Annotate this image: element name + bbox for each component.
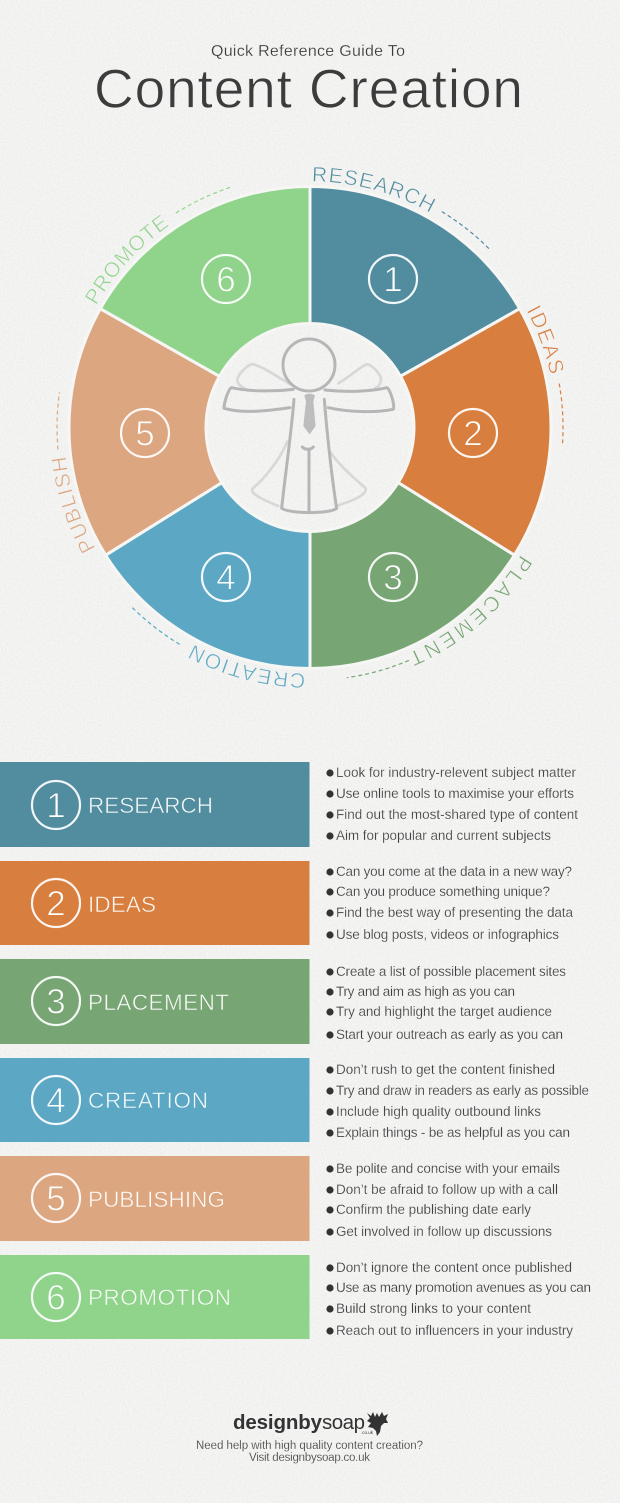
dashed arc: placement bbox=[347, 660, 409, 678]
list: research: Aim for popular and current subjects bbox=[336, 828, 551, 843]
subtitle: Quick Reference Guide To bbox=[211, 43, 405, 60]
curved label: creation: CREATION bbox=[188, 646, 304, 688]
list: research bbox=[326, 765, 578, 843]
segment 2: ideas bbox=[398, 309, 551, 555]
panel: creation: CREATION bbox=[88, 1088, 208, 1113]
list: publishing: Get involved in follow up discussions bbox=[336, 1224, 552, 1239]
list: placement: Start your outreach as early as you can bbox=[336, 1027, 563, 1042]
central figure icon bbox=[224, 339, 394, 513]
list: ideas bbox=[326, 864, 573, 942]
panel: research: 1 bbox=[46, 786, 66, 826]
list: placement bbox=[326, 964, 566, 1042]
list: ideas: Use blog posts, videos or infographics bbox=[336, 927, 559, 942]
list: publishing bbox=[326, 1161, 560, 1239]
number 1 bbox=[369, 255, 417, 303]
list: research: Look for industry-relevent subject matter bbox=[336, 765, 576, 780]
panel: promotion: PROMOTION bbox=[88, 1285, 231, 1310]
dashed arc: promote bbox=[176, 187, 230, 213]
list: creation: Explain things - be as helpful as you can bbox=[336, 1125, 570, 1140]
panel: ideas: IDEAS bbox=[88, 892, 156, 917]
dashed arc: creation bbox=[131, 606, 180, 644]
panel: publishing bbox=[0, 1156, 310, 1241]
dashed arc: ideas bbox=[559, 384, 563, 445]
number 1: 1 bbox=[383, 260, 403, 300]
panel: placement: 3 bbox=[46, 982, 66, 1022]
footer logo bbox=[233, 1411, 388, 1436]
number 6 bbox=[202, 255, 250, 303]
list: ideas: Can you produce something unique? bbox=[336, 884, 550, 899]
wheel diagram bbox=[52, 167, 564, 688]
panel: placement: PLACEMENT bbox=[88, 990, 229, 1015]
dashed arc: research bbox=[442, 212, 490, 250]
list: ideas: Find the best way of presenting the data bbox=[336, 905, 573, 920]
segment 4: creation bbox=[106, 483, 310, 669]
list: research: Find out the most-shared type of content bbox=[336, 807, 578, 822]
panel: creation: 4 bbox=[46, 1082, 66, 1120]
segment 5: publish bbox=[69, 309, 222, 555]
number 4: 4 bbox=[216, 558, 236, 598]
footer logo: .co.uk bbox=[361, 1430, 374, 1435]
panel: placement bbox=[0, 959, 310, 1044]
panel: promotion: 6 bbox=[46, 1278, 66, 1318]
number 6: 6 bbox=[216, 260, 236, 300]
panel: ideas bbox=[0, 861, 310, 945]
segment 3: placement bbox=[310, 483, 514, 668]
curved label: research: RESEARCH bbox=[314, 167, 436, 212]
panel: creation bbox=[0, 1058, 310, 1142]
segment 1: research bbox=[310, 186, 520, 376]
list: promotion: Reach out to influencers in your industry bbox=[336, 1323, 573, 1338]
main title: Content Creation bbox=[94, 58, 523, 120]
list: creation: Try and draw in readers as early as possible bbox=[336, 1083, 589, 1098]
curved label: promote: PROMOTE bbox=[85, 215, 168, 304]
list: promotion bbox=[326, 1260, 591, 1338]
segment 6: promote bbox=[100, 186, 310, 376]
list: promotion: Build strong links to your content bbox=[336, 1301, 531, 1316]
list: research: Use online tools to maximise your efforts bbox=[336, 786, 574, 801]
list: promotion: Don’t ignore the content once published bbox=[336, 1260, 572, 1275]
list: placement: Create a list of possible placement sites bbox=[336, 964, 566, 979]
footer text: Visit designbysoap.co.uk bbox=[249, 1452, 370, 1464]
number 3: 3 bbox=[383, 558, 403, 598]
panel: ideas: 2 bbox=[46, 884, 66, 924]
list: publishing: Don’t be afraid to follow up with a call bbox=[336, 1182, 558, 1197]
list: placement: Try and aim as high as you can bbox=[336, 984, 515, 999]
footer logo: soap bbox=[322, 1411, 365, 1434]
list: creation: Include high quality outbound links bbox=[336, 1104, 541, 1119]
dashed arc: publish bbox=[57, 392, 60, 450]
number 2: 2 bbox=[463, 414, 483, 454]
footer text: Need help with high quality content creation? bbox=[196, 1440, 423, 1452]
list: creation bbox=[326, 1062, 589, 1140]
number 4 bbox=[202, 553, 250, 601]
panel: promotion bbox=[0, 1255, 310, 1339]
number 5 bbox=[121, 409, 169, 457]
curved label: placement: PLACEMENT bbox=[413, 556, 532, 666]
list: publishing: Be polite and concise with your emails bbox=[336, 1161, 560, 1176]
panel: research: RESEARCH bbox=[88, 793, 213, 818]
curved label: ideas: IDEAS bbox=[528, 306, 564, 373]
footer text bbox=[196, 1440, 423, 1464]
panel: publishing: PUBLISHING bbox=[88, 1187, 225, 1212]
list: promotion: Use as many promotion avenues as you can bbox=[336, 1280, 591, 1295]
number 5: 5 bbox=[135, 414, 155, 454]
curved label: publish: PUBLISH bbox=[52, 458, 94, 554]
icon: eagle bbox=[367, 1412, 388, 1436]
panel: publishing: 5 bbox=[46, 1180, 66, 1218]
number 3 bbox=[369, 553, 417, 601]
number 2 bbox=[449, 409, 497, 457]
footer logo: designby bbox=[233, 1411, 323, 1434]
panel: research bbox=[0, 762, 310, 847]
list: publishing: Confirm the publishing date early bbox=[336, 1202, 531, 1217]
list: placement: Try and highlight the target audience bbox=[336, 1004, 552, 1019]
list: ideas: Can you come at the data in a new way? bbox=[336, 864, 572, 879]
title block bbox=[94, 43, 523, 120]
list: creation: Don’t rush to get the content finished bbox=[336, 1062, 555, 1077]
